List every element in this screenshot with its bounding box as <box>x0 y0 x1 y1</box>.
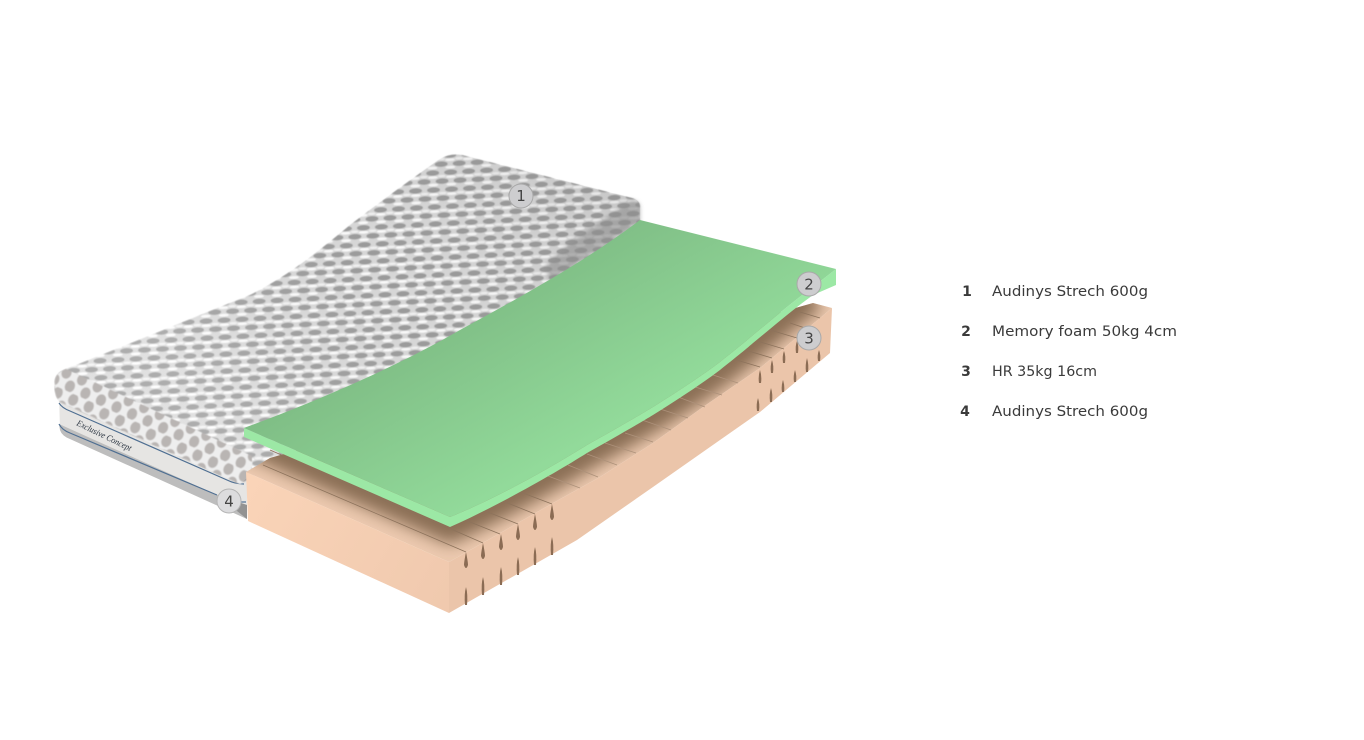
layer 4: bottom cover side band <box>59 395 247 519</box>
memory foam top <box>244 220 836 517</box>
layer 3: HR foam core <box>244 295 832 613</box>
legend row 1: 1 <box>962 284 972 300</box>
layer 2: memory foam <box>244 220 836 527</box>
callout marker 3 <box>797 326 821 350</box>
legend <box>960 284 1177 420</box>
legend row 3: 3 <box>961 364 971 380</box>
foam top surface <box>246 303 832 562</box>
foam side face <box>449 308 832 613</box>
legend row 3: HR 35kg 16cm <box>992 364 1097 380</box>
foam side slits <box>464 341 820 605</box>
foam top grooves <box>263 312 820 552</box>
callout marker 4 <box>217 489 241 513</box>
callout marker 2 <box>797 272 821 296</box>
layer 1: quilted top cover <box>55 154 640 484</box>
cover logo text: Exclusive Concept <box>74 417 134 453</box>
infographic: mattress layers <box>54 154 1176 613</box>
callout marker 2: 2 <box>804 276 814 294</box>
callout marker 1 <box>509 184 533 208</box>
foam front face <box>246 472 449 613</box>
callout marker 1: 1 <box>516 187 526 205</box>
memory foam edge <box>244 269 836 527</box>
legend row 1: Audinys Strech 600g <box>992 284 1148 300</box>
legend row 2: Memory foam 50kg 4cm <box>992 324 1177 340</box>
callout marker 3: 3 <box>804 330 814 348</box>
callout marker 4: 4 <box>224 492 234 510</box>
legend row 4: 4 <box>960 404 970 420</box>
legend row 4: Audinys Strech 600g <box>992 404 1148 420</box>
legend row 2: 2 <box>961 324 971 340</box>
